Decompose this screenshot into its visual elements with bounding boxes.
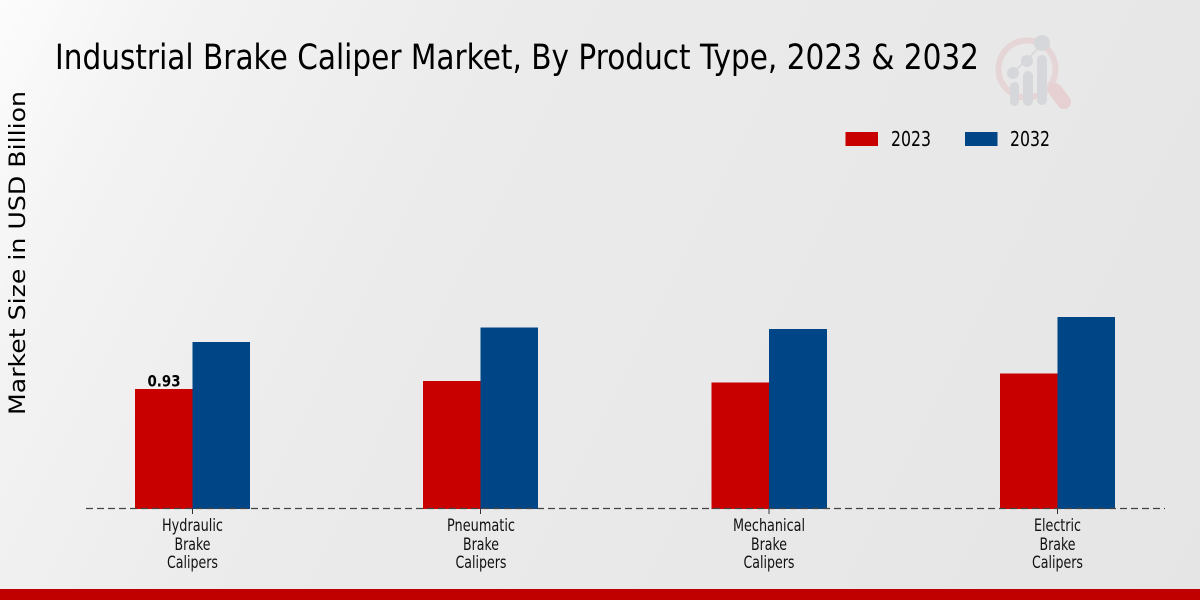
x label: Pneumatic Brake Calipers: Brake xyxy=(463,535,499,554)
x label: Hydraulic Brake Calipers: Calipers xyxy=(167,553,218,572)
bar chart xyxy=(86,317,1165,514)
x label: Hydraulic Brake Calipers: Hydraulic xyxy=(162,516,223,535)
x label: Mechanical Brake Calipers: Calipers xyxy=(744,553,794,572)
x label: Mechanical Brake Calipers: Brake xyxy=(751,535,787,554)
x label: Pneumatic Brake Calipers: Calipers xyxy=(456,553,506,572)
icon: watermark logo xyxy=(998,35,1064,106)
x label: Pneumatic Brake Calipers xyxy=(447,516,515,572)
bars: Hydraulic Brake Calipers xyxy=(135,342,250,509)
legend xyxy=(846,127,1050,151)
x label: Electric Brake Calipers: Calipers xyxy=(1032,553,1083,572)
bars: Pneumatic Brake Calipers xyxy=(423,328,538,509)
x label: Hydraulic Brake Calipers xyxy=(162,516,223,572)
legend: 2023: 2023 xyxy=(891,127,931,151)
x label: Pneumatic Brake Calipers: Pneumatic xyxy=(447,516,515,535)
value label: 0.93: 0.93 xyxy=(148,372,180,390)
legend: 2023 xyxy=(846,127,931,151)
legend: 2032: 2032 xyxy=(1010,127,1050,151)
x label: Mechanical Brake Calipers: Mechanical xyxy=(733,516,805,535)
x label: Electric Brake Calipers: Electric xyxy=(1034,516,1081,535)
x label: Electric Brake Calipers xyxy=(1032,516,1083,572)
title: Industrial Brake Caliper Market, By Product Type, 2023 & 2032 xyxy=(55,38,979,78)
x label: Mechanical Brake Calipers xyxy=(733,516,805,572)
bars: Electric Brake Calipers xyxy=(1000,317,1115,509)
x label: Hydraulic Brake Calipers: Brake xyxy=(174,535,210,554)
bars: Mechanical Brake Calipers xyxy=(712,329,827,509)
legend: 2032 xyxy=(965,127,1050,151)
x label: Electric Brake Calipers: Brake xyxy=(1040,535,1076,554)
y-axis title: Market Size in USD Billion xyxy=(5,91,31,415)
footer bar xyxy=(0,589,1200,600)
